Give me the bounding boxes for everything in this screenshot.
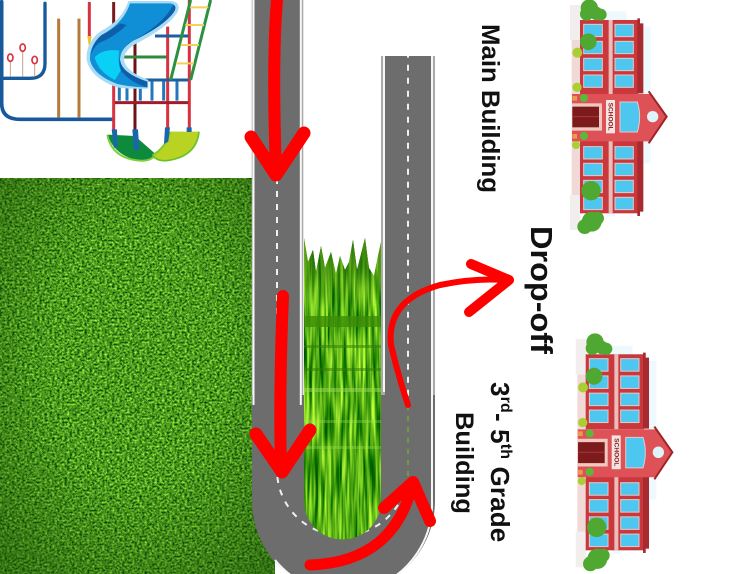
arrow: down into turn [256,296,310,472]
playground [2,0,211,161]
arrow: to drop-off [391,264,509,405]
label: 3rd-5th grade: 3 [485,382,515,397]
label: 3rd-5th grade: rd [497,397,514,413]
icon: swing seats [107,127,199,161]
label: 3rd-5th grade: th [497,444,514,459]
label: drop-off: Drop-off [524,226,559,355]
school building: 3rd-5th grade [576,333,672,571]
label: main building: Main Building [476,24,504,193]
sign text: SCHOOL [607,103,613,131]
panel: centre grass strip [304,238,381,540]
road [252,0,435,574]
panel: lawn [0,178,275,574]
sign text: SCHOOL [612,438,618,467]
icon: bushes [572,0,607,234]
label: 3rd-5th grade: - 5 [485,413,515,444]
label: 3rd-5th grade: Grade [485,459,515,542]
school building: main [570,0,667,234]
arrow: entering road [251,0,304,175]
icon: bushes [578,333,612,571]
arrow: around the turn [310,482,430,565]
label: building: Building [450,412,478,514]
icon: slide [87,1,179,89]
